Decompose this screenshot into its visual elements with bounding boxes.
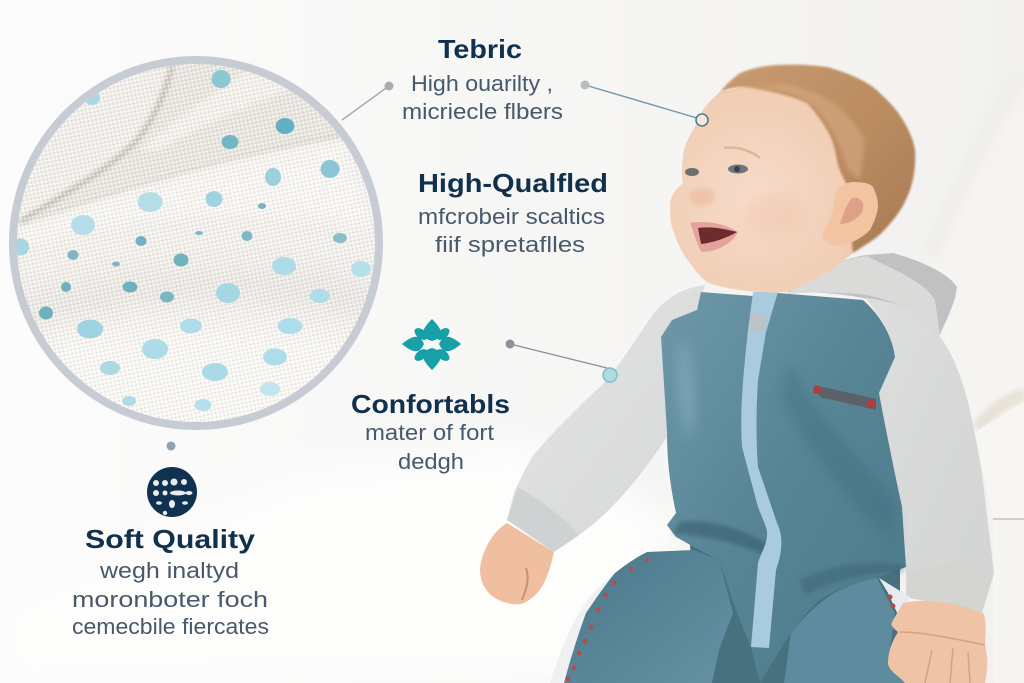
connector: fabric circle to Tebric — [342, 82, 394, 120]
nose — [689, 188, 715, 206]
head — [670, 86, 855, 292]
cheek blush — [751, 198, 794, 230]
left sleeve — [507, 285, 705, 552]
icon: navy circle with small glyphs — [147, 467, 197, 517]
left sleeve cuff — [507, 487, 579, 552]
lower body underlay — [690, 545, 900, 683]
text block: Soft Quality: moronboter foch — [72, 587, 268, 612]
text block: High-Qualfled: mfcrobeir scaltics — [418, 204, 605, 229]
baby left hand — [888, 601, 987, 683]
baby figure — [480, 65, 994, 683]
text block: Tebric — [402, 34, 563, 124]
text block: Confortabls — [351, 389, 510, 474]
zipper pull — [750, 313, 766, 332]
chest pocket with red trim — [813, 385, 876, 410]
right sleeve cuff — [910, 574, 994, 612]
torso — [661, 292, 906, 683]
text block: Soft Quality — [72, 524, 269, 639]
mouth — [690, 222, 738, 252]
white hem at hip — [879, 578, 910, 617]
white side stripe — [550, 573, 615, 683]
text block: High-Qualfled — [418, 168, 608, 257]
right leg — [784, 578, 913, 683]
connector dot above Soft Quality icon — [166, 442, 176, 450]
hair — [720, 65, 915, 253]
baby right hand fist — [480, 523, 554, 604]
text block: Tebric: micriecle flbers — [402, 99, 563, 124]
text block: Confortabls: dedgh — [398, 449, 464, 474]
text block: Confortabls: mater of fort — [365, 420, 494, 445]
text block: Soft Quality: wegh inaltyd — [99, 558, 239, 583]
hood — [787, 253, 957, 335]
panel: fabric close-up circle — [0, 50, 390, 440]
eyes and brows — [728, 164, 748, 174]
text block: Confortabls: Confortabls — [351, 389, 510, 419]
text block: Soft Quality: cemecbile fiercates — [72, 614, 269, 639]
red leg stitching — [566, 558, 896, 681]
droplets on fabric — [13, 70, 371, 411]
text block: Soft Quality: Soft Quality — [85, 524, 256, 554]
zipper — [741, 292, 781, 648]
connector: Tebric to forehead — [580, 80, 708, 126]
ear — [823, 182, 878, 245]
icon: teal flower — [402, 319, 461, 370]
text block: Tebric: High ouarilty , — [411, 71, 553, 96]
left leg — [564, 550, 733, 683]
text block: High-Qualfled: fiif spretaflles — [435, 232, 585, 257]
background: studio backdrop with draped cloth — [786, 0, 1024, 683]
connector: Confortabls to sleeve — [506, 340, 617, 382]
text block: High-Qualfled: High-Qualfled — [418, 168, 608, 198]
text block: Tebric: Tebric — [438, 34, 522, 64]
right sleeve — [865, 298, 994, 613]
